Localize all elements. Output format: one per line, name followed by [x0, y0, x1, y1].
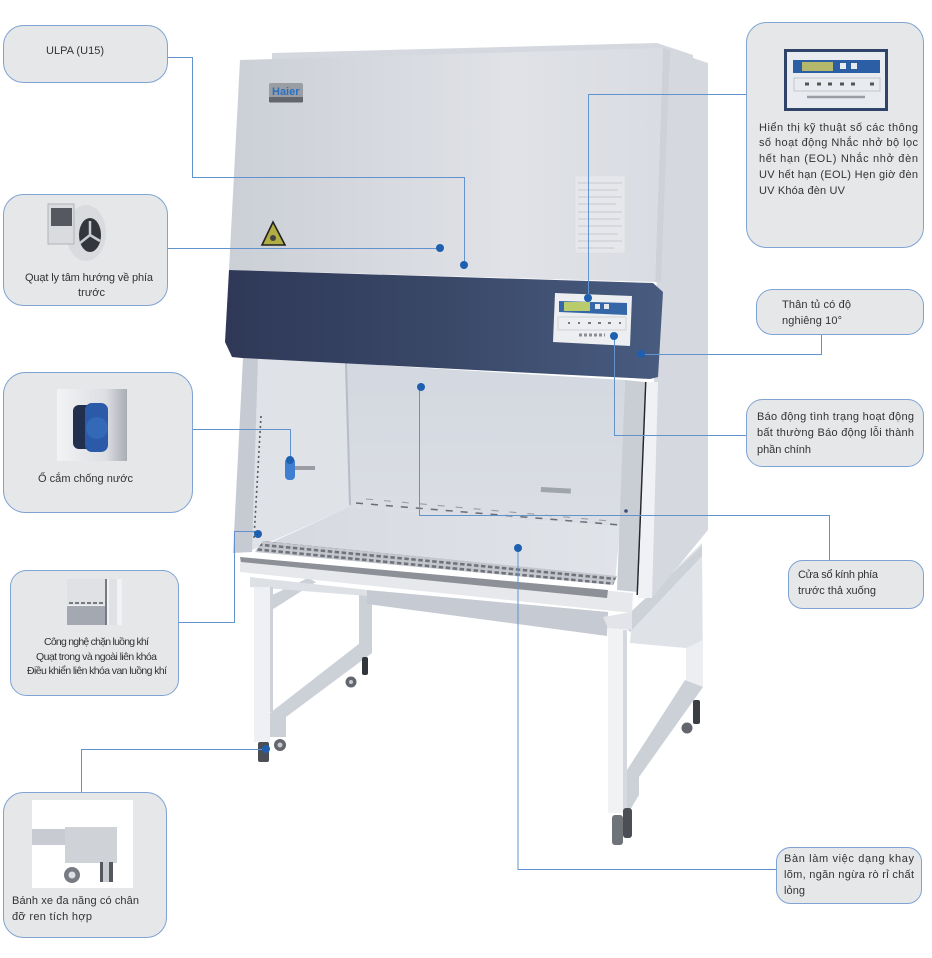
control panel [553, 293, 632, 346]
connector: front window [417, 383, 830, 560]
thumbnail: chamber corner [67, 579, 122, 625]
connector: casters [82, 745, 270, 792]
panel: work tray: lõm, ngăn ngừa rò rỉ chất [784, 869, 914, 881]
connector: work tray [514, 544, 776, 870]
icon: fan [48, 204, 106, 261]
panel: alarms: phần chính [757, 444, 811, 456]
thumbnail: caster [32, 800, 133, 888]
logo: Haier [269, 83, 303, 103]
instruction label [575, 176, 625, 253]
panel: digital display: hết hạn (EOL) Nhắc nhở đèn [759, 152, 918, 165]
cabinet stand [250, 543, 703, 845]
connector: cabinet tilt [637, 335, 822, 358]
logo: Haier: Haier [272, 86, 300, 98]
panel: digital display: UV hết hạn (EOL) Hẹn giờ đèn [759, 169, 918, 181]
panel: alarms: Báo động tình trạng hoạt động [757, 411, 914, 423]
panel: cabinet tilt: Thân tủ có độ [782, 299, 851, 311]
panel: work tray [776, 848, 922, 904]
panel: casters [4, 792, 166, 938]
panel: casters: Bánh xe đa năng có chân [12, 895, 139, 907]
connector: socket [193, 430, 294, 464]
panel: centrifugal fan [4, 194, 168, 306]
panel: front window [788, 560, 924, 608]
panel: air barrier technology: Điều khiển liên khóa van luồng khí [27, 665, 167, 677]
table edge [240, 558, 633, 613]
panel: digital display [746, 22, 924, 248]
blue control band [225, 270, 663, 379]
panel: front window: Cửa sổ kính phía [798, 569, 879, 581]
socket in chamber [285, 458, 315, 480]
panel: front window: trước thả xuống [798, 585, 876, 597]
thumbnail: control panel [784, 49, 888, 111]
icon: socket [57, 389, 127, 461]
tray mesh grille [255, 541, 617, 585]
panel: digital display: Hiển thị kỹ thuật số các thông [759, 122, 918, 134]
connector: fan [168, 244, 444, 252]
panel: waterproof socket [4, 372, 192, 512]
panel: centrifugal fan: Quạt ly tâm hướng về phía [25, 272, 154, 284]
panel: ULPA filter [4, 26, 168, 82]
panel: centrifugal fan: trước [78, 287, 106, 299]
connector: digital display [584, 94, 747, 302]
panel: digital display: UV Khóa đèn UV [759, 185, 846, 197]
panel: alarms [746, 400, 924, 466]
connector: ULPA [168, 58, 468, 269]
panel: work tray: lỏng [784, 885, 805, 897]
illustration: biological safety cabinet [225, 43, 708, 845]
panel: cabinet tilt [756, 290, 924, 334]
cabinet upper body [229, 43, 708, 598]
dotted rail [254, 416, 261, 538]
vent slots [356, 503, 620, 525]
panel: air barrier technology: Quạt trong và ngoài liên khóa [36, 651, 157, 663]
connector: alarm [610, 332, 747, 436]
panel: digital display: số hoạt động Nhắc nhở bộ lọc [759, 136, 918, 149]
connector: air barrier [179, 530, 262, 622]
icon: biohazard warning triangle [262, 222, 285, 245]
panel: casters: đỡ ren tích hợp [12, 911, 92, 923]
panel: cabinet tilt: nghiêng 10° [782, 315, 842, 327]
panel: ULPA filter: ULPA (U15) [46, 45, 104, 57]
panel: waterproof socket: Ổ cắm chống nước [38, 472, 134, 485]
connector lines and dots [82, 58, 830, 870]
panel: alarms: bất thường Báo động lỗi thành [757, 426, 914, 439]
panel: air barrier technology [10, 570, 178, 696]
cabinet work chamber [233, 358, 658, 613]
panel: air barrier technology: Công nghệ chặn luồng khí [44, 636, 149, 648]
panel: work tray: Bàn làm việc dạng khay [784, 853, 914, 865]
